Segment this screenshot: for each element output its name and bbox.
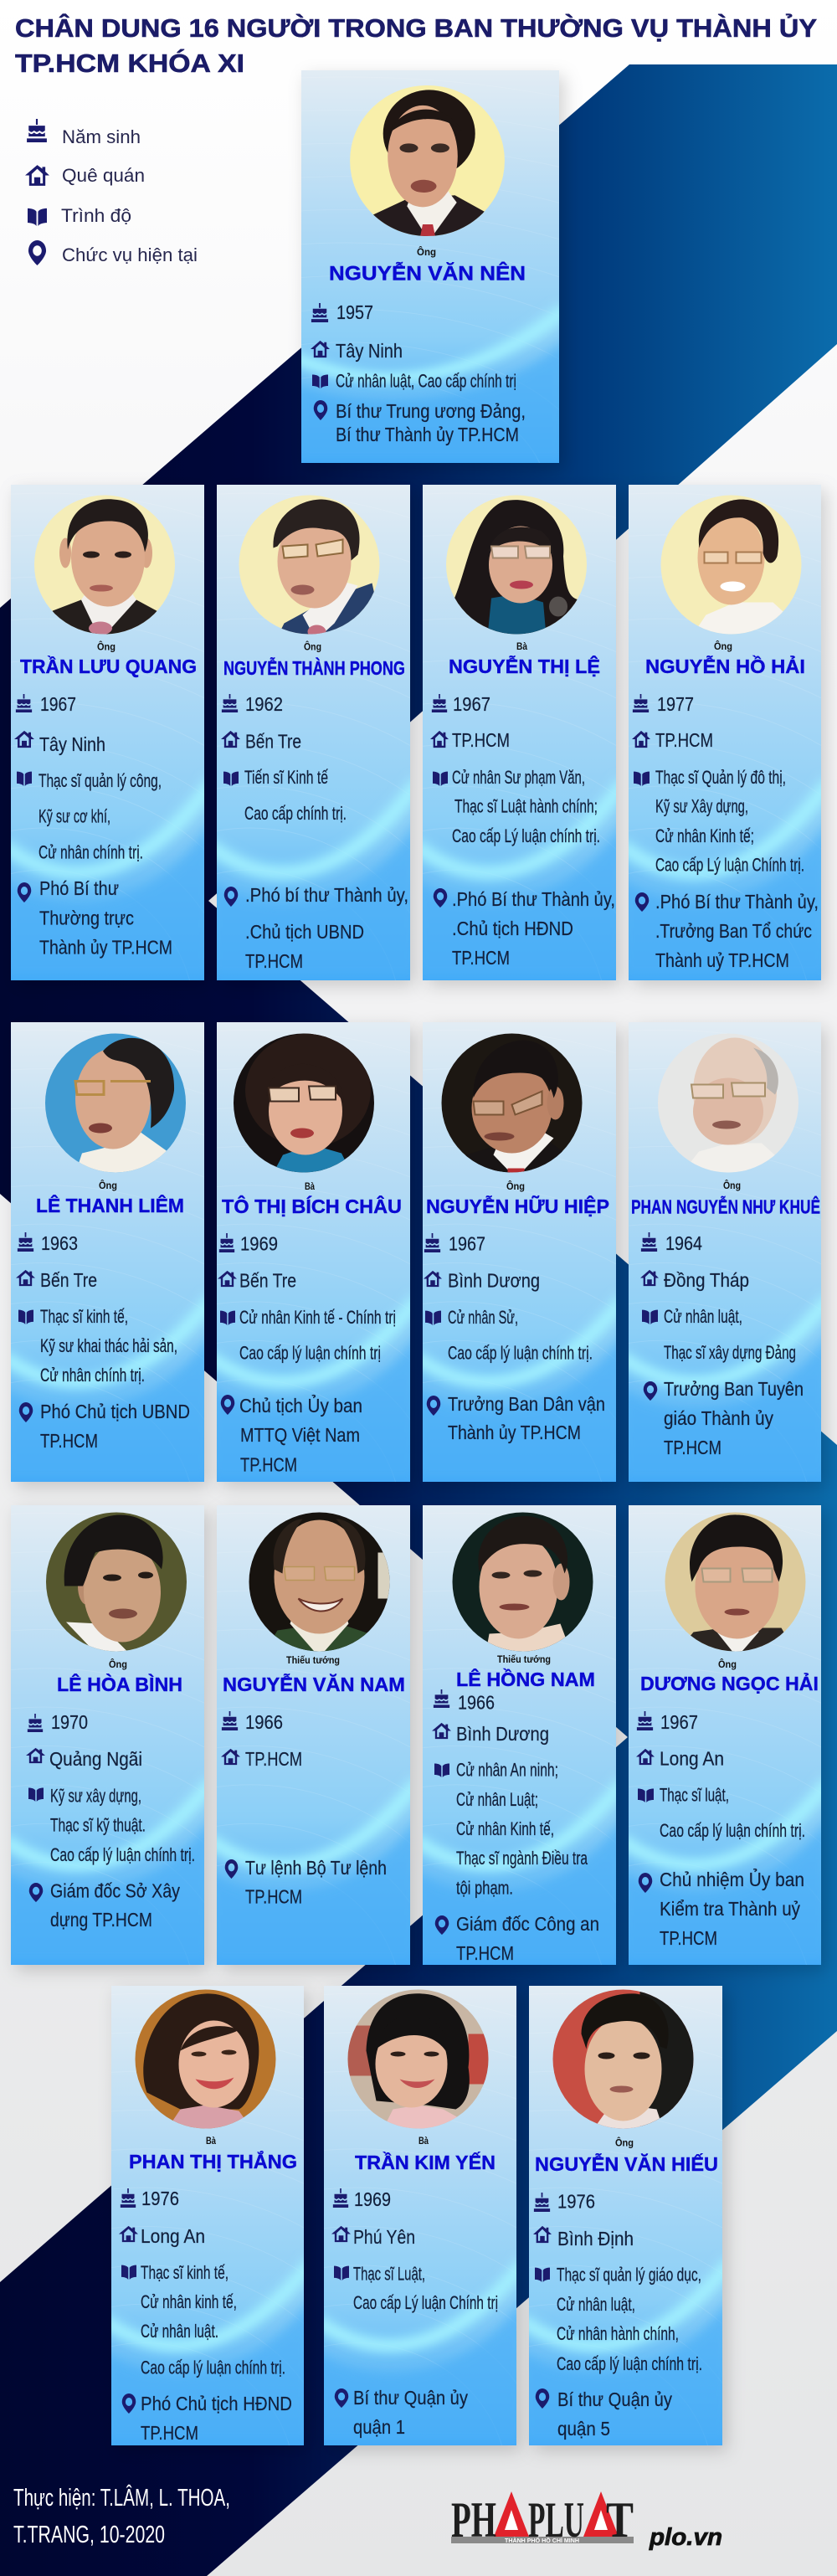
birth year [28, 1711, 88, 1733]
panel: Trần Lưu Quang [3, 485, 213, 980]
hometown [636, 1747, 724, 1769]
education [425, 1307, 593, 1364]
logo: Pháp Luật [451, 2491, 634, 2548]
position [221, 1393, 362, 1476]
education: Thạc sĩ kỹ thuật. [50, 1815, 146, 1835]
position: Chủ nhiệm Ủy ban [660, 1867, 804, 1890]
education: Cao cấp chính trị. [244, 803, 347, 824]
position: Bí thư Thành ủy TP.HCM [336, 424, 519, 445]
portrait: Trần Kim Yến [343, 1984, 494, 2135]
name: LÊ THANH LIÊM [36, 1194, 184, 1216]
education: Cao cấp lý luận chính trị [239, 1343, 381, 1364]
education: Tiến sĩ Kinh tế [244, 767, 328, 788]
position: TP.HCM [456, 1942, 514, 1964]
position: .Phó bí thư Thành ủy, [245, 884, 408, 906]
hometown [218, 1269, 296, 1291]
position: Bí thư Trung ương Đảng, [336, 400, 526, 422]
position [224, 884, 408, 972]
education [223, 767, 347, 824]
legend: Trình độ [61, 205, 131, 226]
legend [25, 119, 198, 265]
position: .Trưởng Ban Tổ chức [655, 920, 812, 942]
position: .Chủ tịch HĐND [452, 918, 573, 939]
birth year: 1976 [141, 2188, 179, 2209]
position: Chủ tịch Ủy ban [239, 1393, 362, 1417]
name: PHAN THỊ THẮNG [129, 2150, 297, 2172]
education [28, 1785, 195, 1865]
logo: Pháp Luật: PLU [528, 2492, 584, 2548]
name: NGUYỄN THÀNH PHONG [223, 656, 405, 679]
education: Thạc sĩ Luật, [353, 2264, 425, 2284]
position: TP.HCM [245, 950, 303, 972]
education: Cử nhân chính trị. [40, 1365, 145, 1386]
hometown: TP.HCM [245, 1748, 302, 1770]
position [434, 888, 615, 969]
hometown: Bến Tre [40, 1269, 97, 1291]
hometown [221, 730, 301, 752]
honorific: Ông [714, 640, 732, 652]
portrait: Dương Ngọc Hải [660, 1507, 810, 1658]
education: Thạc sĩ luật, [660, 1785, 729, 1806]
birth year [222, 693, 283, 715]
position [536, 2388, 672, 2440]
position [19, 1401, 190, 1452]
panel: Tô Thị Bích Châu [208, 1022, 418, 1482]
name: TRẦN LƯU QUANG [20, 655, 197, 677]
name: LÊ HỒNG NAM [456, 1668, 595, 1690]
panel: Phan Thị Thắng [103, 1984, 312, 2445]
position [427, 1393, 605, 1443]
name: NGUYỄN VĂN NÊN [329, 261, 526, 285]
education: Kỹ sư Xây dựng, [655, 795, 748, 817]
panel: Nguyễn Hữu Hiệp [414, 1022, 624, 1482]
portrait: Nguyễn Văn Nam [249, 1512, 390, 1651]
panel: Nguyễn Thị Lệ [414, 485, 624, 980]
title: TP.HCM KHÓA XI [15, 48, 244, 78]
education [433, 767, 600, 846]
birth year: 1967 [453, 693, 490, 715]
hometown [632, 729, 713, 751]
honorific: Ông [97, 640, 116, 652]
portrait: Lê Thanh Liêm [45, 1033, 186, 1172]
position: TP.HCM [660, 1927, 717, 1949]
hometown: Tây Ninh [39, 733, 105, 755]
hometown [16, 1269, 97, 1291]
position: Trưởng Ban Dân vận [448, 1393, 605, 1415]
position: Thành ủy TP.HCM [448, 1422, 581, 1443]
education: Cử nhân kinh tế, [141, 2291, 237, 2312]
panel: Lê Hồng Nam [414, 1505, 624, 1965]
logo: Pháp Luật: THÀNH PHỐ HỒ CHÍ MINH [505, 2536, 579, 2544]
education: Cử nhân luật, [664, 1306, 742, 1327]
education: Cử nhân Sư phạm Văn, [452, 767, 585, 788]
position: TP.HCM [664, 1437, 721, 1458]
position: TP.HCM [240, 1454, 297, 1476]
birth year: 1967 [449, 1232, 485, 1254]
position: Phó Chủ tịch HĐND [141, 2393, 292, 2414]
position [644, 1378, 804, 1458]
hometown [311, 340, 403, 362]
education: Kỹ sư cơ khí, [39, 805, 110, 826]
education [17, 770, 162, 862]
education: Thạc sĩ kinh tế, [40, 1306, 128, 1327]
birth year [424, 1232, 485, 1254]
position: TP.HCM [245, 1886, 302, 1908]
legend: Quê quán [62, 165, 145, 186]
education: Cử nhân Luật; [456, 1789, 538, 1810]
birth year [637, 1711, 698, 1733]
birth year: 1977 [657, 693, 694, 715]
birth year [434, 1689, 495, 1713]
panel: Phan Nguyễn Như Khuê [620, 1022, 829, 1482]
name: NGUYỄN HỮU HIỆP [426, 1194, 609, 1217]
education: Thạc sĩ kinh tế, [141, 2262, 229, 2283]
education: Cử nhân Kinh tế - Chính trị [239, 1307, 396, 1328]
hometown [533, 2226, 634, 2250]
title [15, 13, 817, 78]
birth year: 1957 [336, 301, 373, 323]
birth year: 1969 [240, 1232, 278, 1254]
honorific: Ông [417, 245, 436, 258]
website: plo.vn: plo.vn [649, 2524, 722, 2551]
position: Thành ủy TP.HCM [39, 936, 172, 958]
position: giáo Thành ủy [664, 1407, 773, 1429]
education: Cử nhân luật, [557, 2294, 635, 2315]
credits: T.TRANG, 10-2020 [13, 2522, 165, 2548]
honorific: Ông [99, 1179, 117, 1191]
education [121, 2262, 285, 2378]
education: Cử nhân luật, Cao cấp chính trị [336, 370, 516, 392]
name: NGUYỄN HỒ HẢI [645, 654, 805, 677]
position: Tư lệnh Bộ Tư lệnh [245, 1857, 387, 1879]
birth year: 1967 [660, 1711, 698, 1733]
education: Thạc sĩ Quản lý đô thị, [655, 767, 786, 788]
honorific: Ông [615, 2136, 634, 2148]
education: Cử nhân luật. [141, 2321, 218, 2342]
birth year: 1967 [40, 693, 76, 715]
position: TP.HCM [141, 2422, 198, 2444]
education: Cao cấp lý luận chính trị. [141, 2357, 285, 2378]
education [334, 2264, 498, 2313]
birth year: 1976 [557, 2190, 595, 2212]
name: NGUYỄN VĂN HIẾU [535, 2152, 718, 2175]
panel: Lê Thanh Liêm [3, 1022, 213, 1482]
hometown [331, 2226, 415, 2248]
position [335, 2387, 468, 2438]
honorific: Bà [305, 1180, 315, 1192]
birth year [534, 2190, 595, 2212]
position: MTTQ Việt Nam [240, 1424, 360, 1446]
education: Thạc sĩ quản lý công, [39, 770, 162, 791]
education: Cử nhân Sử, [448, 1307, 518, 1328]
name: TRẦN KIM YẾN [355, 2151, 496, 2173]
panel: Dương Ngọc Hải [620, 1505, 829, 1965]
hometown: Bình Định [557, 2228, 634, 2250]
title: CHÂN DUNG 16 NGƯỜI TRONG BAN THƯỜNG VỤ THÀNH ỦY [15, 13, 817, 43]
birth year [219, 1232, 278, 1254]
birth year [311, 301, 373, 323]
education [220, 1307, 396, 1364]
position: Giám đốc Công an [456, 1913, 599, 1935]
portrait: Nguyễn Hồ Hải [661, 496, 802, 635]
birth year [18, 1232, 78, 1254]
hometown: Phú Yên [353, 2226, 415, 2248]
position [122, 2393, 292, 2444]
logo: Pháp Luật: T [606, 2492, 634, 2548]
birth year [432, 693, 490, 715]
name: LÊ HÒA BÌNH [57, 1673, 182, 1695]
education: Kỹ sư khai thác hải sản, [40, 1335, 177, 1356]
name: TÔ THỊ BÍCH CHÂU [222, 1195, 402, 1217]
education [642, 1306, 796, 1363]
portrait: Nguyễn Thành Phong [239, 496, 380, 635]
panel: Trần Kim Yến [316, 1984, 525, 2445]
position: quận 5 [557, 2418, 610, 2440]
education: Cử nhân Kinh tế, [456, 1818, 554, 1839]
birth year: 1963 [41, 1232, 78, 1254]
honorific: Bà [418, 2135, 429, 2147]
hometown: Bình Dương [448, 1269, 540, 1291]
position: TP.HCM [452, 947, 510, 969]
position [18, 877, 172, 958]
birth year [16, 693, 76, 715]
education [535, 2264, 702, 2374]
hometown: Đồng Tháp [664, 1269, 749, 1291]
birth year: 1964 [665, 1232, 702, 1254]
honorific: Thiếu tướng [286, 1654, 340, 1666]
position [314, 400, 526, 445]
birth year: 1962 [245, 693, 283, 715]
panel: Nguyễn Văn Nên [290, 70, 570, 463]
position: quận 1 [353, 2416, 405, 2438]
education: Cử nhân hành chính, [557, 2323, 679, 2344]
legend: Chức vụ hiện tại [62, 244, 198, 265]
education [434, 1760, 588, 1899]
education: Cao cấp Lý luận Chính trị [353, 2292, 498, 2313]
hometown [14, 731, 105, 755]
position: Thành uỷ TP.HCM [655, 949, 789, 971]
portrait: Lê Hồng Nam [452, 1512, 593, 1651]
portrait: Nguyễn Hữu Hiệp [442, 1033, 583, 1172]
position: .Phó Bí thư Thành ủy, [452, 888, 615, 910]
panel: Nguyễn Văn Hiếu [521, 1984, 731, 2445]
education: Cao cấp lý luận chính trị. [557, 2353, 702, 2374]
birth year [333, 2188, 391, 2210]
position: Phó Chủ tịch UBND [40, 1401, 190, 1422]
name: DƯƠNG NGỌC HẢI [640, 1671, 819, 1694]
education: Thạc sĩ quản lý giáo dục, [557, 2264, 701, 2285]
education: Thạc sĩ ngành Điều tra [456, 1848, 588, 1869]
position [639, 1867, 804, 1949]
honorific: Ông [723, 1179, 741, 1191]
position [225, 1857, 387, 1908]
position [435, 1913, 599, 1964]
birth year [633, 693, 694, 715]
panel: Nguyễn Văn Nam [208, 1505, 418, 1965]
honorific: Ông [304, 640, 321, 652]
birth year: 1969 [354, 2188, 391, 2210]
panel: Nguyễn Hồ Hải [620, 485, 829, 980]
logo: Pháp Luật: PH [451, 2492, 496, 2548]
birth year: 1966 [458, 1691, 495, 1713]
position: Trưởng Ban Tuyên [664, 1378, 804, 1400]
hometown [119, 2225, 205, 2247]
education [18, 1306, 177, 1386]
credits: Thực hiện: T.LÂM, L. THOA, [13, 2484, 230, 2512]
hometown [221, 1748, 302, 1770]
position: Kiểm tra Thành uỷ [660, 1898, 800, 1920]
education: Cử nhân chính trị. [39, 842, 143, 862]
credits [13, 2484, 230, 2548]
education: Cử nhân Kinh tế; [655, 825, 754, 846]
education [634, 767, 804, 876]
hometown: Bình Dương [456, 1723, 549, 1745]
position: .Chủ tịch UBND [245, 921, 364, 943]
portrait: Nguyễn Văn Nên [350, 85, 505, 236]
education: tội phạm. [456, 1878, 513, 1899]
portrait: Nguyễn Văn Hiếu [547, 1984, 698, 2135]
hometown: Bến Tre [245, 730, 301, 752]
portrait: Phan Thị Thắng [131, 1984, 281, 2135]
hometown: Quảng Ngãi [49, 1748, 142, 1770]
education: Cao cấp lý luận chính trị. [448, 1343, 593, 1364]
position: .Phó Bí thư Thành ủy, [655, 891, 819, 913]
hometown: Tây Ninh [336, 340, 403, 362]
position: Giám đốc Sở Xây [50, 1880, 180, 1902]
portrait: Nguyễn Thị Lệ [446, 496, 587, 635]
hometown: TP.HCM [655, 729, 713, 751]
legend: Năm sinh [62, 126, 141, 147]
position: TP.HCM [40, 1430, 98, 1452]
position [635, 891, 819, 971]
birth year: 1966 [245, 1711, 283, 1733]
panel: Lê Hòa Bình [3, 1505, 213, 1965]
birth year [641, 1232, 702, 1254]
position: Phó Bí thư [39, 877, 119, 899]
education [638, 1785, 805, 1841]
position: dựng TP.HCM [50, 1909, 152, 1931]
panel: Nguyễn Thành Phong [208, 485, 418, 980]
honorific: Ông [109, 1658, 127, 1670]
position: Bí thư Quận ủy [557, 2388, 672, 2410]
honorific: Thiếu tướng [497, 1653, 551, 1665]
hometown: Long An [660, 1747, 724, 1769]
hometown [430, 729, 510, 751]
education: Kỹ sư xây dựng, [50, 1785, 141, 1807]
hometown: TP.HCM [452, 729, 510, 751]
education: Cao cấp Lý luận chính trị. [452, 825, 600, 846]
education [312, 370, 516, 392]
honorific: Bà [516, 640, 527, 652]
birth year: 1970 [51, 1711, 88, 1733]
portrait: Lê Hòa Bình [46, 1512, 187, 1651]
honorific: Bà [206, 2135, 216, 2147]
education: Thạc sĩ Luật hành chính; [454, 795, 598, 817]
honorific: Ông [506, 1180, 525, 1192]
name: NGUYỄN VĂN NAM [223, 1672, 405, 1695]
position: Bí thư Quận ủy [353, 2387, 468, 2409]
position: Thường trực [39, 908, 134, 929]
education: Cử nhân An ninh; [456, 1760, 558, 1781]
birth year [222, 1711, 283, 1733]
hometown: Long An [141, 2225, 205, 2247]
honorific: Ông [718, 1658, 737, 1670]
portrait: Trần Lưu Quang [34, 496, 175, 635]
position [29, 1880, 180, 1931]
name: NGUYỄN THỊ LỆ [449, 654, 600, 677]
portrait: Phan Nguyễn Như Khuê [658, 1033, 798, 1172]
education: Cao cấp lý luận chính trị. [50, 1844, 195, 1865]
birth year [121, 2188, 179, 2209]
portrait: Tô Thị Bích Châu [234, 1033, 374, 1172]
hometown: Bến Tre [239, 1269, 296, 1291]
